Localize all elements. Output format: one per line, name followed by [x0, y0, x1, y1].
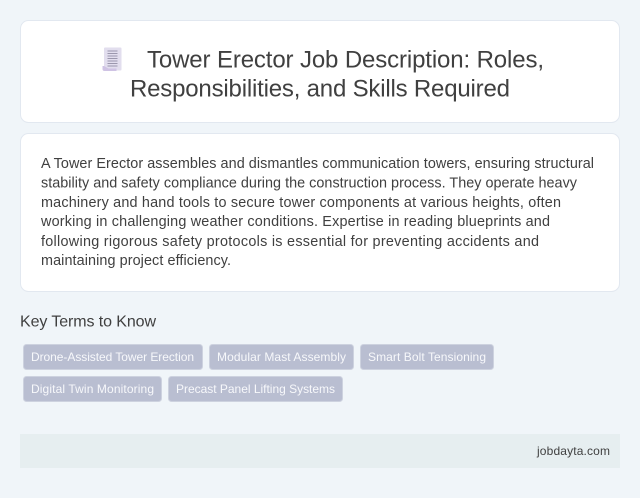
- panel: description: [20, 134, 620, 292]
- chip: precast panel: Precast Panel Lifting Systems: [176, 382, 335, 396]
- chip: drone-assisted: [24, 344, 202, 370]
- chip: digital twin: [24, 376, 162, 402]
- title: [130, 46, 544, 102]
- heading: key terms: Key Terms to Know: [20, 314, 156, 330]
- chip: drone-assisted: Drone-Assisted Tower Erection: [31, 350, 194, 364]
- text block: description: following rigorous safety protocols is essential for preventing accidents and: [41, 234, 539, 250]
- text block: description: A Tower Erector assembles and dismantles communication towers, ensuring structural: [41, 156, 594, 172]
- key term chips: [24, 344, 494, 402]
- text block: description: machinery and hand tools to secure tower components at various heights, often: [41, 195, 561, 211]
- title: Tower Erector Job Description: Roles,: [147, 46, 544, 74]
- chip: modular mast: [210, 344, 354, 370]
- text block: description: maintaining project efficiency.: [41, 253, 231, 269]
- text block: description: working in challenging weather conditions. Expertise in reading blueprints and: [40, 214, 550, 230]
- chip: precast panel: [168, 376, 342, 402]
- chip: modular mast: Modular Mast Assembly: [217, 350, 346, 364]
- chip: smart bolt: Smart Bolt Tensioning: [368, 350, 486, 364]
- text block: description: [40, 156, 594, 269]
- chip: digital twin: Digital Twin Monitoring: [31, 382, 154, 396]
- panel: title card: [20, 20, 620, 122]
- footer: [20, 434, 620, 468]
- footer: jobdayta.com: [536, 444, 610, 458]
- chip: smart bolt: [360, 344, 494, 370]
- icon: document scroll: [102, 48, 122, 71]
- text block: description: stability and safety compliance during the construction process. They operate heavy: [41, 176, 578, 192]
- title: Responsibilities, and Skills Required: [130, 76, 510, 102]
